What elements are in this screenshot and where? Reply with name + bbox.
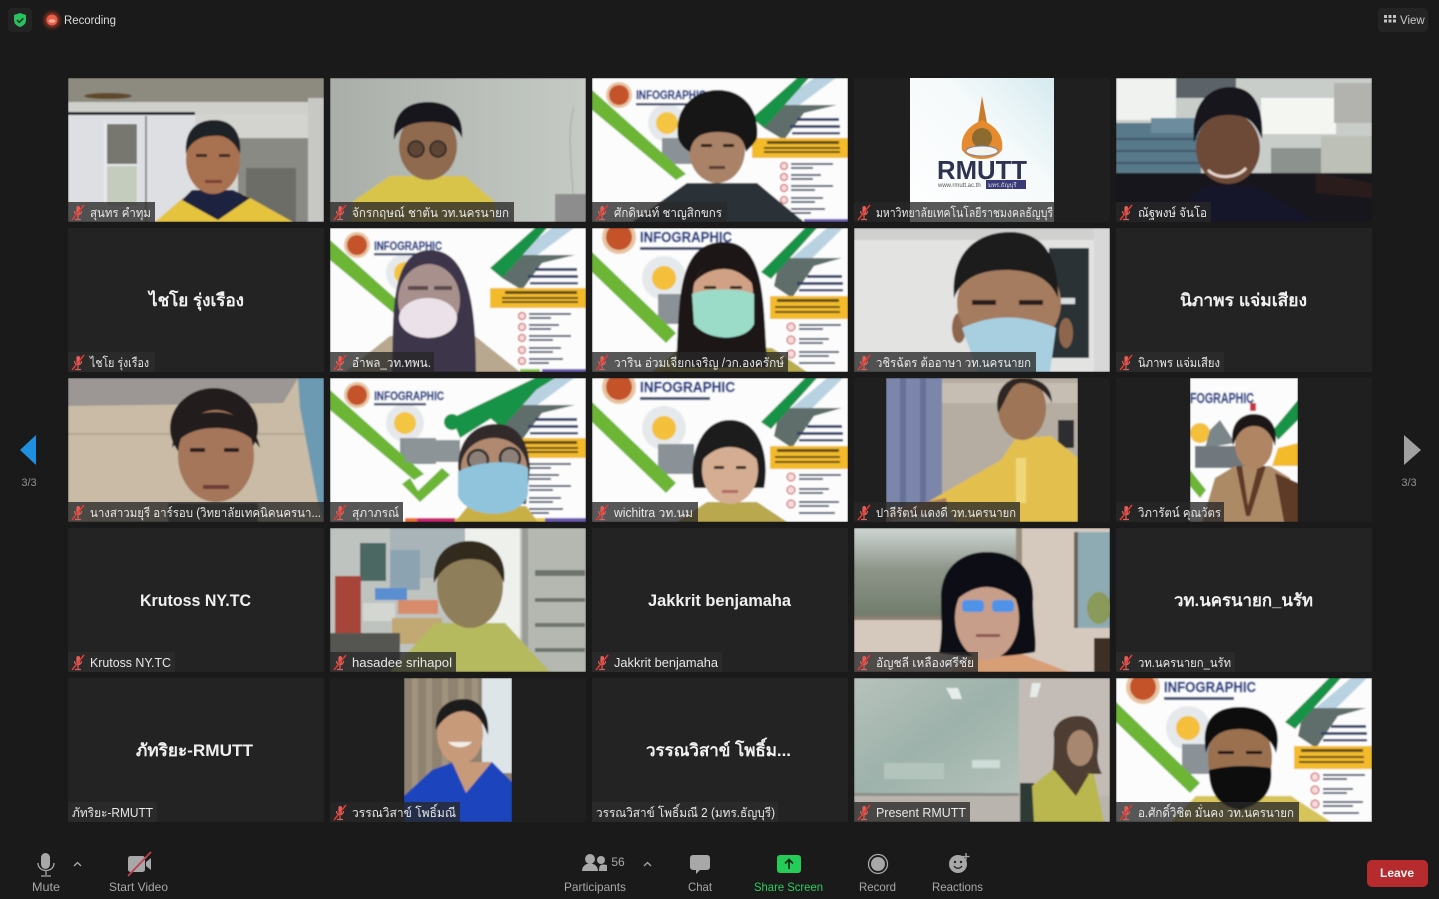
name label: วาริน อ่วมเจียกเจริญ /วก.องครักษ์ xyxy=(614,356,784,370)
RMUTT logo image: www.rmutt.ac.th xyxy=(937,183,981,189)
top bar: recording indicator xyxy=(44,12,116,28)
participants button: Participants xyxy=(564,880,626,894)
participant tile: สุภาภรณ์ xyxy=(330,378,586,522)
name label: มหาวิทยาลัยเทคโนโลยีราชมงคลธัญบุรี xyxy=(876,205,1053,221)
name label: Krutoss NY.TC xyxy=(90,656,171,670)
top bar: view button xyxy=(1378,8,1428,32)
participant tile: wichitra xyxy=(592,378,848,522)
mute button: Mute xyxy=(32,880,60,894)
share screen button: Share Screen xyxy=(754,880,823,894)
start video button xyxy=(109,852,168,894)
name label: อัญชลี เหลืองศรีชัย xyxy=(876,656,974,670)
video scene: room xyxy=(68,78,324,222)
video scene: woman in blue shirt xyxy=(404,678,512,822)
record button xyxy=(859,854,896,894)
participants button: 56 xyxy=(611,855,625,869)
participant tile: วชิรฉัตร xyxy=(854,228,1110,372)
name label: วิภารัตน์ คุณวัตร xyxy=(1138,506,1221,521)
name label xyxy=(330,202,514,222)
video scene: poster and man xyxy=(592,78,848,222)
participant tile: สุนทร คำทุม xyxy=(68,78,324,222)
name label: ปาลีรัตน์ แดงดี วท.นครนายก xyxy=(876,506,1016,520)
name label xyxy=(592,652,722,672)
participant tile: วาริน xyxy=(592,228,848,372)
name label xyxy=(592,352,788,372)
name label xyxy=(1116,652,1235,672)
top bar: recording indicator: Recording xyxy=(64,15,116,27)
participant tile: อ.ศักดิ์วิชิต xyxy=(1116,678,1372,822)
participant tile: hasadee srihapol xyxy=(330,528,586,672)
video scene: man with glasses xyxy=(330,78,586,222)
chat button xyxy=(688,855,713,894)
name label: อ.ศักดิ์วิชิต มั่นคง วท.นครนายก xyxy=(1138,803,1294,820)
participant tile: วรรณวิสาข์ โพธิ์มณี 2 (no video) xyxy=(592,678,848,822)
leave button xyxy=(1367,860,1428,887)
video scene: poster and woman: INFOGRAPHIC xyxy=(640,379,735,396)
top bar: security shield xyxy=(8,8,32,32)
name label xyxy=(68,352,155,372)
video scene: office with paper stacks xyxy=(1116,78,1372,222)
name label: อำพล_วท.ทพน. xyxy=(352,356,431,370)
name label: วท.นครนายก_นรัท xyxy=(1138,656,1231,670)
right page arrow xyxy=(1401,435,1421,489)
name label: hasadee srihapol xyxy=(352,656,452,670)
name label: ณัฐพงษ์ จันโอ xyxy=(1138,205,1207,220)
name label: วรรณวิสาข์ โพธิ์มณี 2 (มทร.ธัญบุรี) xyxy=(596,803,775,821)
video scene: poster and man with black mask xyxy=(1116,670,1372,822)
name label xyxy=(1116,352,1224,372)
name label xyxy=(68,652,175,672)
toolbar xyxy=(32,852,1428,894)
participant tile: Present RMUTT xyxy=(854,678,1110,822)
name label xyxy=(68,802,157,822)
display name: วท.นครนายก_นรัท xyxy=(1174,591,1313,610)
video scene: presenter by whiteboard xyxy=(854,678,1110,822)
video scene: woman with short hair and painting xyxy=(854,528,1111,672)
leave button: Leave xyxy=(1380,866,1414,880)
participant tile: วิภารัตน์ xyxy=(1116,378,1298,522)
video scene: poster and woman with glasses xyxy=(330,378,586,522)
name label xyxy=(854,502,1020,522)
name label: ภัทริยะ-RMUTT xyxy=(72,806,153,820)
video scene: poster and woman in brown: FOGRAPHIC xyxy=(1190,390,1254,407)
video scene: poster and woman with white mask: INFOGRAPHIC xyxy=(374,239,442,253)
participant tile: อัญชลี xyxy=(854,528,1110,672)
participant tile: วท.นครนายก_นรัท (no video) xyxy=(1116,528,1372,672)
video scene: woman against beige wall xyxy=(68,378,324,522)
participants button xyxy=(564,854,626,894)
name label xyxy=(592,802,778,822)
name label xyxy=(854,202,1054,222)
name label xyxy=(592,202,727,222)
video scene: poster and woman with glasses: INFOGRAPHIC xyxy=(374,389,444,403)
name label: นิภาพร แจ่มเสียง xyxy=(1138,356,1220,370)
right page arrow: 3/3 xyxy=(1401,477,1417,489)
video scene: poster and woman with teal mask: INFOGRAPHIC xyxy=(640,229,732,246)
participant tile: ไชโย รุ่งเรือง (no video) xyxy=(68,228,324,372)
left page arrow xyxy=(20,435,37,489)
start video button: Start Video xyxy=(109,880,168,894)
name label: Present RMUTT xyxy=(876,806,966,820)
participant tile: จักรกฤษณ์ ชาตัน xyxy=(330,78,586,222)
participant tile: Jakkrit benjamaha (no video) xyxy=(592,528,848,672)
participant tile: ปาลีรัตน์ xyxy=(854,378,1078,522)
participant tile: วรรณวิสาข์ โพธิ์มณี xyxy=(330,678,512,822)
name label xyxy=(330,802,460,822)
RMUTT logo image: RMUTT xyxy=(937,155,1027,185)
name label xyxy=(1116,802,1299,822)
display name: ไชโย รุ่งเรือง xyxy=(147,290,244,311)
name label xyxy=(330,352,434,372)
video scene: poster and woman with teal mask xyxy=(592,220,848,372)
share screen button xyxy=(754,855,823,894)
name label: wichitra วท.นม xyxy=(613,506,693,520)
audio menu caret xyxy=(74,862,81,866)
participant tile: ภัทริยะ-RMUTT (no video) xyxy=(68,678,324,822)
name label xyxy=(330,502,403,522)
participant tile: อำพล xyxy=(330,228,586,372)
name label: วรรณวิสาข์ โพธิ์มณี xyxy=(352,803,456,820)
name label: สุนทร คำทุม xyxy=(90,206,151,221)
name label xyxy=(1116,202,1211,222)
video scene: poster and woman xyxy=(592,370,848,522)
participants menu caret xyxy=(644,862,651,866)
video scene: woman in yellow shirt xyxy=(886,378,1078,522)
participant tile: นางสาวมยุรี xyxy=(68,378,324,522)
name label xyxy=(68,202,155,222)
name label xyxy=(68,502,324,522)
video scene: poster and woman with white mask xyxy=(330,228,586,372)
left page arrow: 3/3 xyxy=(21,477,37,489)
participant tile: นิภาพร แจ่มเสียง (no video) xyxy=(1116,228,1372,372)
participant tile: ณัฐพงษ์ จันโอ xyxy=(1116,78,1372,222)
reactions button xyxy=(932,853,983,894)
video scene: man with blue mask xyxy=(854,228,1110,372)
display name: นิภาพร แจ่มเสียง xyxy=(1180,290,1307,310)
RMUTT logo image xyxy=(910,78,1054,222)
name label: วชิรฉัตร ต้ออาษา วท.นครนายก xyxy=(876,356,1031,370)
video scene: woman in shop xyxy=(330,528,586,672)
video scene: poster and man: INFOGRAPHIC xyxy=(636,88,706,102)
name label xyxy=(330,652,456,672)
name label xyxy=(854,652,978,672)
display name: วรรณวิสาข์ โพธิ์ม... xyxy=(646,737,791,760)
name label xyxy=(592,502,698,522)
display name: Jakkrit benjamaha xyxy=(648,591,792,610)
mute button xyxy=(32,853,60,894)
name label: ศักดินนท์ ชาญสิกขกร xyxy=(614,206,722,220)
participant tile: university logo xyxy=(854,78,1054,222)
name label xyxy=(854,352,1036,372)
participant tile: Krutoss NY.TC (no video) xyxy=(68,528,324,672)
display name: Krutoss NY.TC xyxy=(140,591,251,610)
video scene: poster and man with black mask: INFOGRAPHIC xyxy=(1164,679,1256,696)
reactions button: Reactions xyxy=(932,880,983,894)
chat button: Chat xyxy=(688,880,713,894)
record button: Record xyxy=(859,880,896,894)
name label: สุภาภรณ์ xyxy=(352,506,399,521)
name label: ไชโย รุ่งเรือง xyxy=(89,355,149,371)
top bar: view button: View xyxy=(1400,15,1425,27)
name label: จักรกฤษณ์ ชาตัน วท.นครนายก xyxy=(352,206,509,220)
display name: ภัทริยะ-RMUTT xyxy=(136,741,254,760)
name label: Jakkrit benjamaha xyxy=(614,656,718,670)
RMUTT logo image: มทร.ธัญบุรี xyxy=(988,181,1017,189)
participant tile: ศักดินนท์ ชาญสิกขกร xyxy=(592,78,848,222)
name label xyxy=(854,802,970,822)
name label xyxy=(1116,502,1224,522)
video scene: poster and woman in brown xyxy=(1190,378,1298,522)
